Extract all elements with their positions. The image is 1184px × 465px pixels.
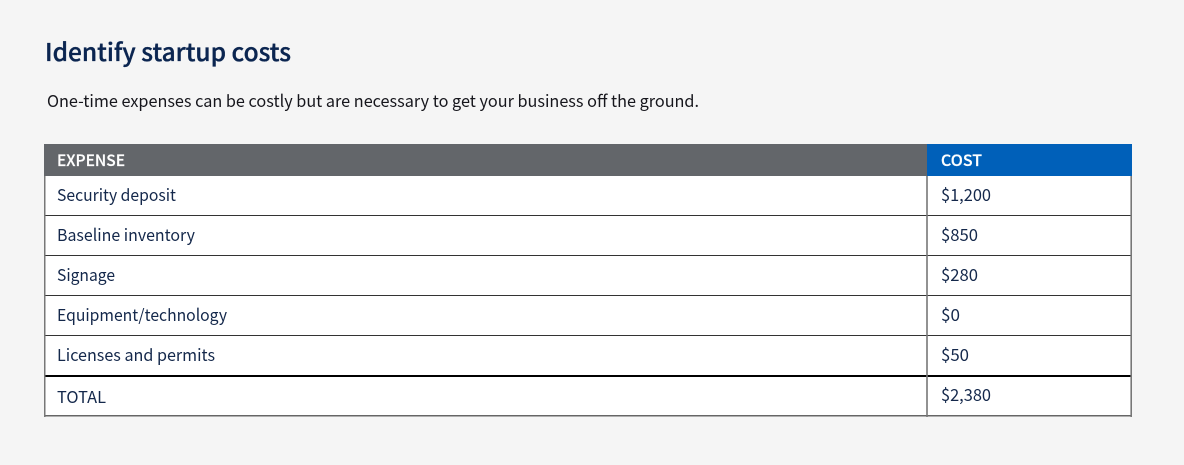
row: licenses and permits: Licenses and permits: [57, 342, 215, 366]
row: signage: Signage: [57, 262, 115, 286]
row: equipment/technology: $0: [941, 302, 960, 326]
row: security deposit: [57, 182, 991, 206]
table body: [45, 176, 1131, 416]
row: signage: $280: [941, 262, 978, 286]
header: expense: [44, 144, 927, 176]
expense table: [44, 144, 1132, 417]
row: signage: [57, 262, 978, 286]
row: baseline inventory: $850: [941, 222, 978, 246]
row: total: [57, 382, 991, 408]
header: expense: EXPENSE: [57, 149, 125, 171]
header: cost: [927, 144, 1132, 176]
row: total: TOTAL: [57, 384, 106, 408]
row: equipment/technology: [57, 302, 960, 326]
row: total: $2,380: [941, 382, 991, 406]
row: security deposit: $1,200: [941, 182, 991, 206]
row: licenses and permits: $50: [941, 342, 969, 366]
row: baseline inventory: [57, 222, 978, 246]
intro text: One-time expenses can be costly but are necessary to get your business off the ground.: [47, 88, 699, 112]
row: equipment/technology: Equipment/technology: [57, 302, 227, 326]
row: security deposit: Security deposit: [57, 182, 176, 206]
row lines: [44, 176, 1132, 417]
header: cost: COST: [941, 149, 982, 171]
row: licenses and permits: [57, 342, 969, 366]
title: Identify startup costs: [45, 34, 291, 69]
row: baseline inventory: Baseline inventory: [57, 222, 195, 246]
